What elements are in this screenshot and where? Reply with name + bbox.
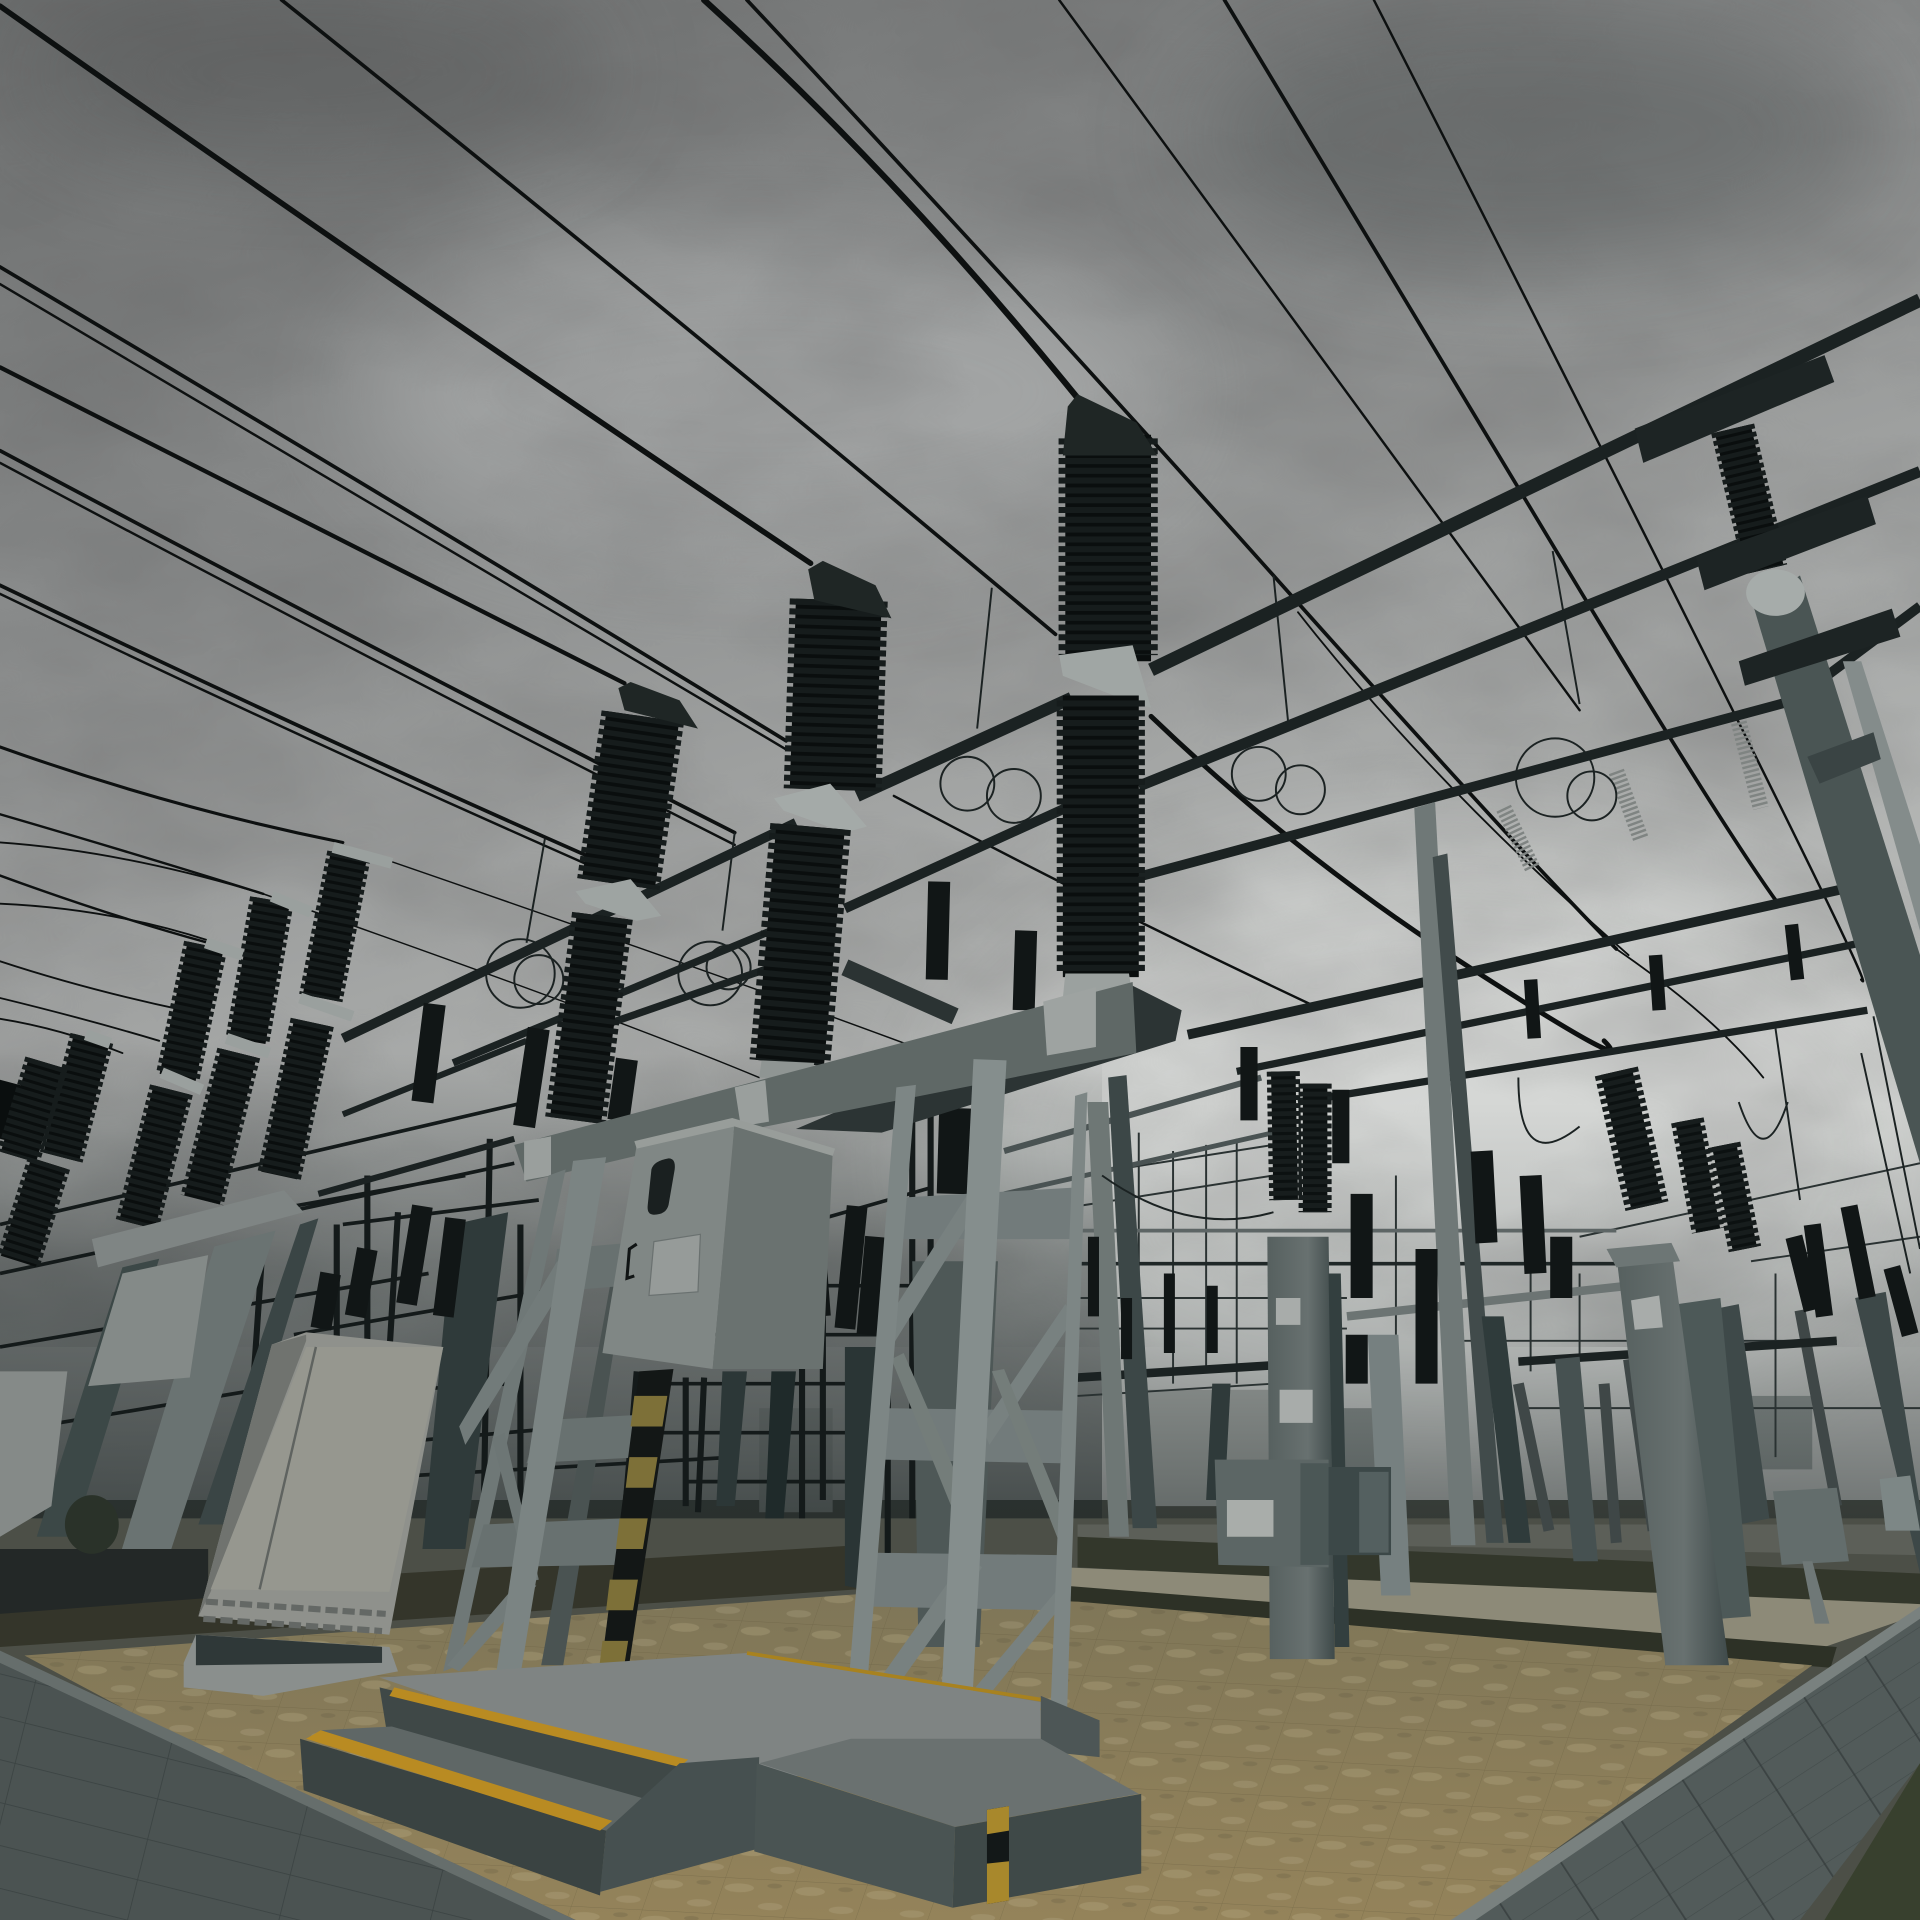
cabinet handle — [627, 1244, 637, 1278]
arcing jumper loops — [486, 551, 1920, 1273]
plinth front wall — [600, 1757, 759, 1892]
mid field steel support posts — [198, 802, 1920, 1596]
frame base bolts — [851, 1745, 1058, 1794]
plinth top — [380, 1653, 1041, 1782]
main tall insulator: rear phase — [576, 682, 698, 1120]
wall mounted control cabinet — [602, 1118, 835, 1369]
beam end plate — [1043, 987, 1096, 1056]
gantry main beam — [514, 982, 1136, 1182]
cabinet label plate — [649, 1234, 700, 1296]
front right concrete posts with boxes — [1215, 1237, 1920, 1665]
distant buildings — [759, 1390, 1812, 1512]
insulator mid flange — [1059, 645, 1151, 708]
walkway: left concrete slabs — [0, 1651, 576, 1920]
front galvanised gantry — [514, 982, 1182, 1182]
insulator mid flange — [774, 784, 867, 833]
left support gantry and cabinet — [0, 1190, 304, 1614]
control box right — [1329, 1467, 1391, 1555]
lower step tread — [321, 1727, 649, 1831]
cabinet vents — [203, 1602, 386, 1631]
pavement: tan brick plaza — [24, 1594, 1812, 1920]
upper step yellow edge — [389, 1687, 688, 1767]
control box left — [1215, 1460, 1329, 1567]
insulator base — [759, 1060, 814, 1080]
insulator top cap — [618, 682, 698, 729]
lower step face — [300, 1739, 606, 1896]
medium disconnector insulators on right — [1283, 1071, 1745, 1249]
cabinet window — [648, 1158, 675, 1215]
beam collar plate — [524, 1080, 769, 1180]
lower step yellow edge — [306, 1730, 612, 1831]
lower right block top — [759, 1739, 1139, 1827]
lower right block side — [953, 1794, 1141, 1908]
post: second pole — [1678, 1298, 1751, 1619]
right side block — [1041, 1696, 1100, 1757]
post: tall foreground pole — [1616, 1249, 1729, 1665]
main tall insulator: middle phase — [759, 561, 891, 1080]
horizontal bus bars — [318, 300, 1920, 1378]
cabinet door line — [260, 1347, 316, 1589]
insulator top cap — [808, 561, 891, 618]
upper overhead wires — [0, 0, 1863, 1078]
insulator lower stack — [1070, 696, 1132, 977]
control box far right — [1773, 1488, 1849, 1565]
suspended glass insulator strings — [1504, 722, 1761, 869]
rear yellow edge — [747, 1653, 1096, 1720]
concrete column behind frame — [912, 1261, 998, 1647]
post: centre pole — [1267, 1237, 1335, 1659]
tower clamp brackets — [1635, 355, 1900, 686]
right steel support frame — [842, 1059, 1087, 1794]
gantry beam rear section — [796, 986, 1182, 1133]
cabinet side — [713, 1122, 833, 1369]
large floor standing cabinet — [184, 1332, 443, 1696]
cabinet plinth — [184, 1635, 398, 1696]
insulator base — [1063, 973, 1133, 998]
lower right block front — [754, 1763, 955, 1908]
ground: grass and gravel band — [0, 1500, 1920, 1920]
concrete steps plinth — [300, 1653, 1141, 1908]
left steel support frame — [443, 1157, 649, 1675]
dense background steelwork — [0, 1053, 1920, 1592]
insulator lower stack — [790, 827, 811, 1063]
black and yellow hazard post — [598, 1369, 673, 1696]
block hazard yellow bands — [987, 1806, 1009, 1904]
cabinet roof lip — [634, 1118, 835, 1156]
distant small insulators and hardware — [321, 882, 1910, 1384]
left column insulators — [0, 847, 392, 1261]
block hazard stripe — [987, 1806, 1009, 1904]
walkway: right cable trench covers — [1451, 1607, 1920, 1920]
far right steel tower — [1635, 355, 1920, 1163]
tower upper insulator — [1733, 429, 1766, 569]
upper step face — [380, 1687, 686, 1824]
insulator upper stack — [1073, 435, 1143, 661]
insulator top cap — [1063, 394, 1157, 456]
insulator mid flange — [576, 879, 661, 921]
post labels — [1276, 1296, 1663, 1423]
cabinet door — [602, 1122, 735, 1369]
insulator upper stack — [618, 716, 643, 884]
main tall insulator: front phase — [1059, 394, 1157, 998]
insulator lower stack — [576, 916, 602, 1120]
insulator upper stack — [833, 600, 839, 790]
